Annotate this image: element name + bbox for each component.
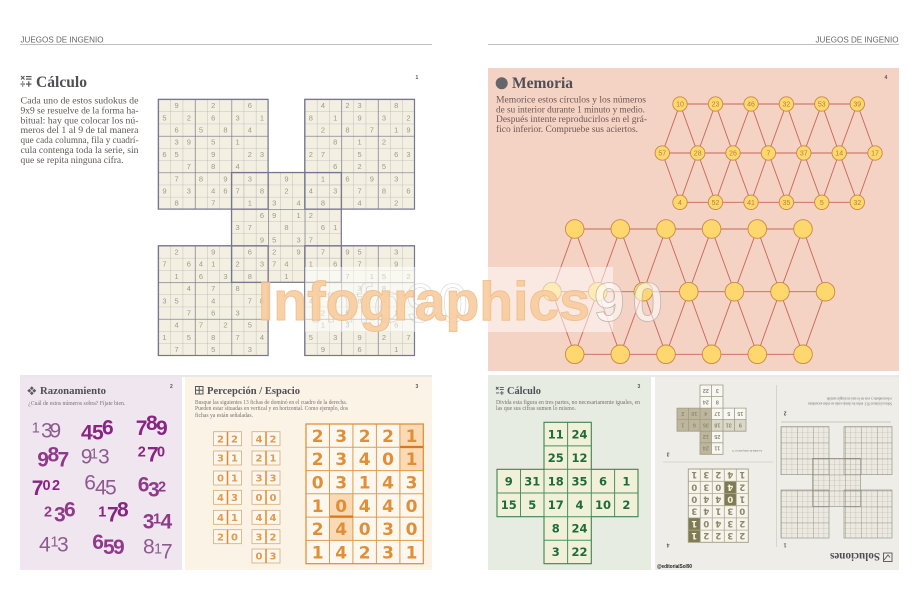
level number: 2 [170, 384, 173, 390]
chart: numbered circle network: 57 [658, 150, 666, 158]
heading: Percepción / Espacio [207, 385, 300, 397]
heading: Cálculo [507, 385, 541, 397]
icon: math symbols [20, 76, 32, 87]
solution: domino grid: 14231 [691, 469, 745, 479]
number cloud: 645 [84, 471, 117, 499]
text block: que cada columna, fila y cuadrí- [20, 135, 138, 145]
text block: de su interior durante 1 minuto y medio. [496, 104, 645, 114]
number grid: 23221 [312, 427, 418, 447]
solution: domino grid: 03143 [691, 506, 745, 516]
chart: numbered circle network: 4 [678, 200, 682, 207]
watermark: 90 outline: 90 [594, 271, 663, 333]
solution: domino grid: 4 [727, 481, 733, 491]
chart: empty circle network [543, 220, 835, 364]
text block: fico inferior. Compruebe sus aciertos. [496, 124, 638, 134]
number cloud: 789 [136, 412, 168, 440]
level number: 4 [884, 75, 888, 81]
cross number grid: 17 [548, 498, 564, 512]
cross number grid: 6 [599, 474, 607, 488]
number cloud [32, 412, 173, 563]
chart: samurai sudoku: 3951812 [175, 138, 386, 147]
domino tiles: 0133 [217, 474, 277, 485]
running header left: JUEGOS DE INGENIO [20, 34, 104, 44]
question text: ¿Cuál de estos números sobra? Fíjate bien. [28, 401, 126, 407]
cross number grid: 25 [548, 451, 564, 465]
chart: numbered circle network: 41 [747, 200, 755, 207]
heading: Cálculo [36, 74, 87, 91]
chart: numbered circle network [655, 97, 882, 210]
text block: Después intente reproducirlos en el grá- [496, 114, 647, 124]
chart: samurai sudoku [158, 99, 415, 356]
solution: domino grid: 1 [691, 518, 697, 528]
text block: Busque las siguientes 13 fichas de dominó en el cuadro de la derecha. [195, 399, 347, 406]
chart: numbered circle network: 10 [676, 102, 684, 108]
number cloud: 139 [32, 419, 61, 442]
domino tiles [214, 432, 280, 563]
number cloud: 456 [81, 416, 114, 444]
text block [496, 399, 640, 412]
chart: numbered circle network: 37 [800, 150, 808, 158]
number cloud: 702 [32, 477, 60, 500]
domino tiles: 2032 [217, 532, 277, 543]
solution: cross grid [677, 385, 746, 454]
solution: cross grid: 10 [691, 410, 697, 416]
panel: percepcion espacio [185, 377, 432, 570]
chart: samurai sudoku: 763251 [187, 308, 398, 318]
chart: samurai sudoku: 658428719 [175, 126, 410, 134]
chart: numbered circle network: 14 [835, 150, 843, 158]
domino tiles: 4144 [217, 513, 277, 524]
text block: Pueden estar situadas en vertical y en horizontal. Como ejemplo, dos [195, 406, 349, 412]
chart: samurai sudoku: 4725136 [175, 321, 398, 330]
solution: razonamiento note [808, 396, 892, 406]
solution: cross grid: 24 [702, 445, 709, 451]
text block: bitual: hay que colocar los nú- [20, 115, 139, 125]
cross number grid: 3 [552, 545, 560, 559]
level number: 3 [638, 384, 640, 390]
cross number grid: 35 [571, 474, 588, 488]
running header right: JUEGOS DE INGENIO [816, 34, 899, 44]
text block: meros del 1 al 9 de tal manera [20, 125, 138, 135]
chart: numbered circle network: 5 [820, 200, 824, 207]
number cloud: 913 [81, 445, 110, 468]
number cloud: 632 [138, 474, 166, 502]
solution: cross grid: 24 [702, 398, 709, 404]
solution: label 4: 4 [666, 542, 670, 548]
solution: domino grid: 2322 [703, 530, 745, 540]
watermark: ghost outline text: Info90 [308, 272, 468, 334]
chart: samurai sudoku: 1587453927 [162, 333, 410, 342]
text block: Cada uno de estos sudokus de [20, 96, 138, 106]
solution: cross grid: 8 [716, 398, 719, 404]
heading: Memoria [512, 75, 573, 92]
chart: samurai sudoku: 6912 [260, 211, 313, 220]
cross number grid: 11 [548, 427, 564, 441]
solution: domino grid: 2340 [703, 518, 745, 528]
icon: grey circle [496, 77, 508, 89]
solution: label 3: 3 [666, 451, 670, 457]
chart: numbered circle network: 26 [729, 150, 737, 158]
text block: fichas ya están señaladas. [195, 412, 253, 419]
text block: 9x9 se resuelve de la forma ha- [20, 106, 139, 116]
number cloud: 236 [44, 499, 76, 527]
solution: cross grid: 11 [714, 445, 720, 451]
number grid: 23401 [312, 450, 418, 470]
level number: 1 [416, 75, 418, 81]
solution: sudoku grid [781, 427, 892, 538]
solution: cross grid: 31 [726, 422, 732, 428]
cross number grid: 22 [571, 545, 588, 559]
chart: numbered circle network: 46 [747, 102, 755, 108]
cross number grid: 10 [595, 498, 611, 512]
number grid: 24030 [312, 520, 418, 540]
chart: numbered circle network: 32 [853, 200, 861, 207]
text block: Divida esta figura en tres partes, no necesariamente iguales, en [496, 399, 640, 406]
text block: que se repita ninguna cifra. [20, 155, 124, 165]
panel rule right [488, 375, 899, 377]
solution: domino grid: 2030 [691, 481, 745, 491]
solution: domino grid: 1 [691, 530, 697, 540]
chart: numbered circle network: 35 [783, 200, 790, 207]
chart: samurai sudoku: 753961 [175, 345, 398, 354]
cross number grid: 8 [552, 521, 560, 535]
number cloud: 987 [37, 444, 69, 472]
chart: numbered circle network: 53 [818, 102, 826, 108]
icon: math symbols [496, 387, 504, 395]
solution: cross grid: 12 [703, 433, 709, 439]
text block: las que sus cifras sumen lo mismo. [496, 405, 576, 412]
panel rule left [20, 375, 432, 377]
number cloud: 817 [143, 535, 173, 563]
solution: cross grid: 4 [703, 410, 707, 416]
chart: samurai sudoku: 6592327563 [162, 150, 410, 159]
chart: samurai sudoku: 87134842 [175, 199, 398, 208]
icon: dice squares [196, 386, 203, 394]
number cloud: 270 [138, 444, 165, 467]
domino tiles: 2242 [217, 434, 277, 445]
chart: samurai sudoku: 47838 [187, 284, 386, 293]
text block: cula contenga toda la serie, sin [20, 145, 139, 155]
highlighted dominoes [330, 424, 423, 540]
chart: samurai sudoku: 37861 [236, 223, 337, 232]
text block [195, 399, 349, 419]
solution: cross grid: 3 [716, 387, 719, 393]
solution: cross grid: 18 [714, 422, 720, 428]
panel: memoria [488, 68, 899, 371]
solution: cross grid: 2 [681, 410, 684, 416]
chart: samurai sudoku: 296297953 [175, 248, 398, 256]
solution: domino grid [688, 469, 748, 542]
icon: check box [884, 553, 892, 562]
icon: diamonds [27, 386, 36, 395]
watermark: Infographics wordmark: Infographics [258, 270, 590, 332]
chart: numbered circle network: 28 [694, 150, 702, 158]
number cloud: 413 [39, 534, 69, 557]
cross number grid: 5 [528, 498, 536, 512]
cross number grid: 15 [501, 498, 517, 512]
solution: cross grid: 1 [681, 422, 684, 428]
number grid: 10440 [312, 497, 418, 517]
solution: cross grid: 6 [693, 422, 696, 428]
solution: cross grid: 22 [703, 387, 709, 393]
cross number grid: 31 [524, 474, 540, 488]
chart: samurai sudoku: 764123741679 [162, 260, 398, 269]
solution: domino grid: 1440 [691, 494, 745, 504]
domino tiles: 4300 [217, 493, 277, 504]
solution: cross grid: 17 [714, 410, 720, 416]
solution: caption: La suma de cada parte es 71 [732, 449, 762, 453]
chart: samurai sudoku: 789391693 [175, 174, 398, 183]
text block [496, 94, 647, 134]
cross number grid [497, 422, 638, 564]
solution: credit: @editorialSol90 [657, 564, 692, 570]
panel: soluciones [655, 377, 899, 570]
number cloud: 659 [92, 531, 125, 559]
chart: numbered circle network: 23 [712, 102, 719, 108]
chart: numbered circle network: 32 [783, 102, 790, 108]
watermark: translucent band [305, 267, 613, 332]
chart: samurai sudoku: 354784684 [162, 296, 386, 305]
solution: label 1: 1 [784, 542, 786, 548]
chart: samurai sudoku: 9537 [260, 235, 313, 244]
solution: razonamiento note: Sobra el número 913: todos los demás están en orden ascendente [808, 402, 892, 406]
solution: cross grid: 15 [737, 410, 743, 416]
heading: Razonamiento [40, 386, 106, 397]
cross number grid: 9 [505, 474, 513, 488]
domino tiles: 3121 [217, 454, 277, 465]
domino tiles: 03 [256, 552, 277, 563]
panel: calculo sudoku intro [20, 74, 418, 165]
number grid: 14231 [312, 543, 418, 563]
chart: samurai sudoku: 5263181932 [162, 113, 410, 122]
text block [20, 96, 139, 165]
solution: label 2: 2 [784, 410, 786, 416]
chart: numbered circle network: 17 [871, 150, 879, 158]
solution: domino grid: 0 [727, 494, 733, 504]
cross number grid: 1 [622, 474, 630, 488]
solution: heading: Soluciones [829, 550, 880, 562]
chart: numbered circle network: 7 [766, 150, 770, 158]
cross number grid: 24 [571, 521, 588, 535]
solution: cross grid: 25 [714, 433, 720, 439]
cross number grid: 24 [571, 427, 588, 441]
chart: samurai sudoku: 9264238 [175, 101, 398, 110]
chart: samurai sudoku: 784625 [187, 162, 386, 171]
solution: cross grid: 35 [703, 422, 709, 428]
chart: samurai sudoku: 934678243786 [162, 186, 410, 196]
solution: razonamiento note: o descendente y este no lo está en ningún sentido. [826, 396, 892, 402]
chart: samurai sudoku: 163817152 [175, 272, 410, 281]
number cloud: 178 [98, 499, 129, 527]
cross number grid: 18 [548, 474, 564, 488]
solution: cross grid: 9 [739, 422, 742, 428]
chart: numbered circle network: 52 [712, 200, 719, 207]
cross number grid: 2 [622, 498, 630, 512]
cross number grid: 12 [571, 451, 588, 465]
cross number grid: 4 [575, 498, 584, 512]
text block: Memorice estos círculos y los números [496, 94, 647, 104]
number grid [306, 424, 423, 564]
level number: 3 [416, 384, 418, 390]
panel: calculo cross [488, 377, 651, 570]
solution: cross grid: 5 [727, 410, 730, 416]
number cloud: 314 [143, 510, 172, 533]
number grid: 03143 [312, 474, 418, 494]
chart: numbered circle network: 39 [853, 102, 861, 108]
panel: razonamiento [20, 377, 182, 570]
